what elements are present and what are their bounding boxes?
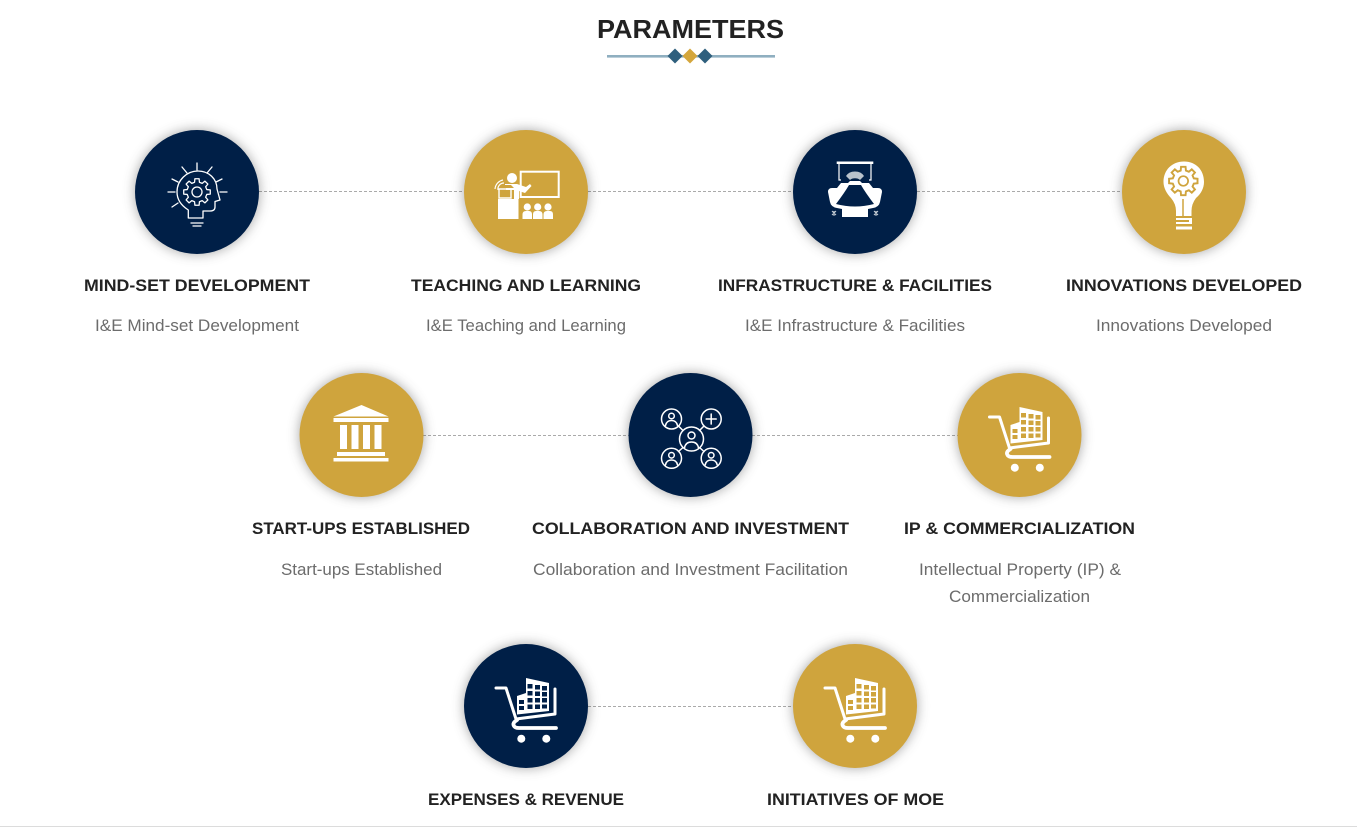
heading: TEACHING AND LEARNING [411, 276, 641, 295]
circle and icon: meeting room [793, 130, 917, 254]
description: I&E Teaching and Learning [426, 317, 626, 335]
panel: collaboration and investment [532, 373, 850, 579]
description: Intellectual Property (IP) & [919, 561, 1121, 579]
circle and icon: teacher with class [464, 130, 588, 254]
circle and icon: light bulb with gear [1122, 130, 1246, 254]
connectors [259, 192, 1122, 706]
heading: INITIATIVES OF MOE [767, 790, 944, 809]
panel: expenses and revenue [428, 644, 624, 809]
circle and icon: people network [628, 373, 752, 497]
description: Start-ups Established [281, 561, 442, 579]
title [597, 14, 784, 64]
heading: COLLABORATION AND INVESTMENT [532, 519, 850, 538]
panel: start-ups established [252, 373, 470, 579]
panel: IP and commercialization [904, 373, 1135, 606]
panel: teaching and learning [411, 130, 641, 335]
heading: INNOVATIONS DEVELOPED [1066, 276, 1302, 295]
heading: EXPENSES & REVENUE [428, 790, 624, 809]
description [919, 561, 1121, 606]
description: Commercialization [949, 588, 1090, 606]
circle and icon: institution building [300, 373, 424, 497]
circle and icon: head with gear [135, 130, 259, 254]
heading: INFRASTRUCTURE & FACILITIES [718, 276, 992, 295]
description: I&E Infrastructure & Facilities [745, 317, 965, 335]
title: PARAMETERS [597, 14, 784, 44]
heading: MIND-SET DEVELOPMENT [84, 276, 311, 295]
panel: infrastructure and facilities [718, 130, 992, 335]
description: Collaboration and Investment Facilitation [533, 561, 848, 579]
heading: IP & COMMERCIALIZATION [904, 519, 1135, 538]
panel: innovations developed [1066, 130, 1302, 335]
heading: START-UPS ESTABLISHED [252, 519, 470, 538]
description: I&E Mind-set Development [95, 317, 299, 335]
panel: initiatives of MOE [767, 644, 944, 809]
circle and icon: shopping cart with building [793, 644, 917, 768]
circle and icon: shopping cart with building [958, 373, 1082, 497]
circle and icon: shopping cart with building [464, 644, 588, 768]
panel: mind-set development [84, 130, 311, 335]
description: Innovations Developed [1096, 317, 1272, 335]
